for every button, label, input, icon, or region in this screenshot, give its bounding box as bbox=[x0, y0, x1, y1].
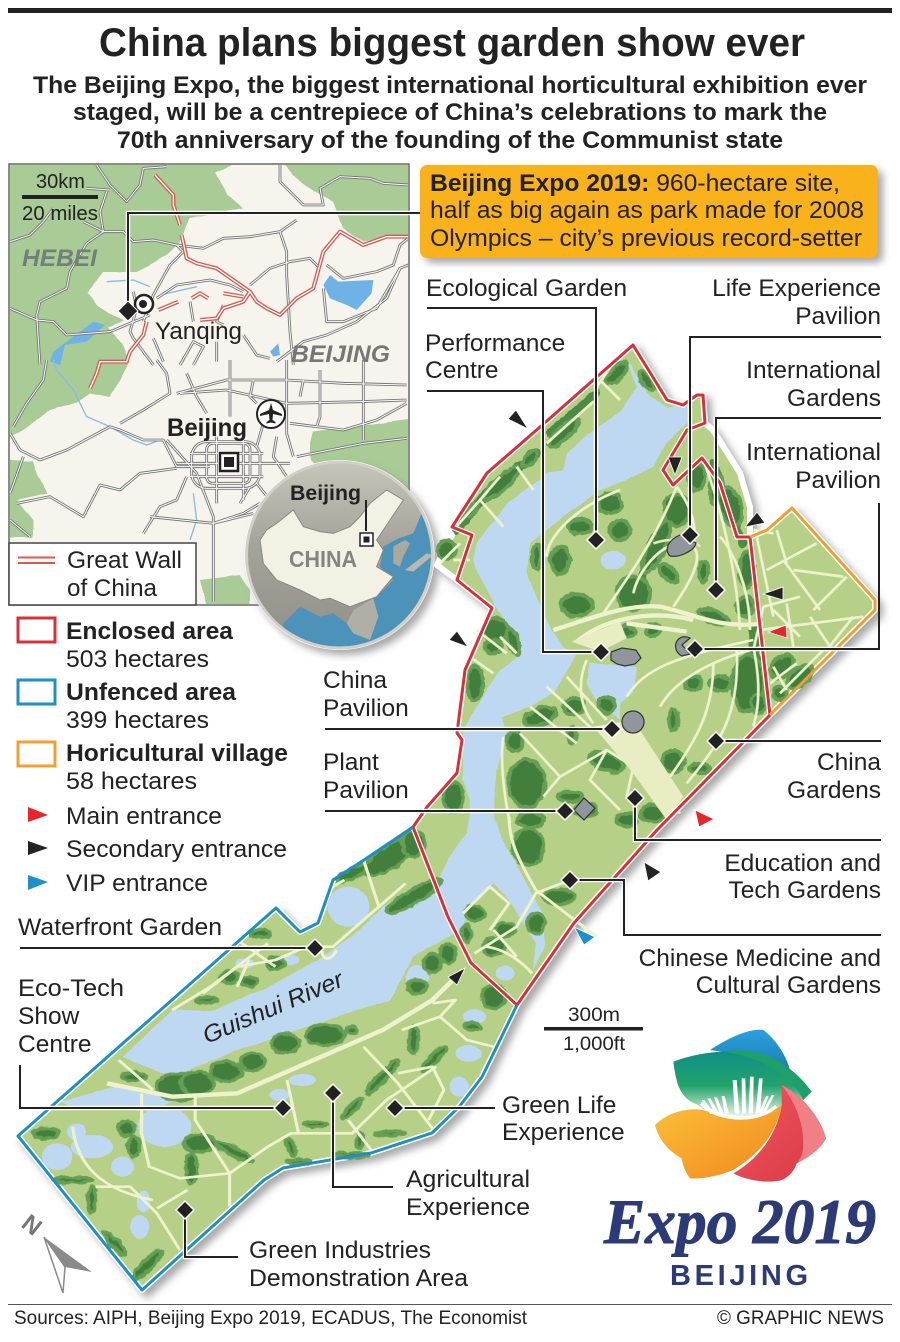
legend: areas and entrances: 503 hectares bbox=[66, 646, 209, 673]
label: Education and Tech Gardens: Education and bbox=[724, 850, 881, 877]
label: Eco-Tech Show Centre bbox=[18, 975, 124, 1058]
subtitle: staged, will be a centrepiece of China’s celebrations to mark the bbox=[73, 99, 827, 126]
legend: areas and entrances: 58 hectares bbox=[66, 768, 197, 795]
label: China Gardens: Gardens bbox=[787, 777, 881, 804]
unfenced area boundary bbox=[18, 827, 517, 1290]
label: International Pavilion bbox=[746, 439, 881, 494]
label: Green Industries Demonstration Area: Green Industries bbox=[249, 1237, 431, 1264]
subtitle bbox=[33, 72, 867, 154]
horticultural village boundary bbox=[750, 508, 875, 715]
roads bbox=[10, 165, 408, 602]
legend: areas and entrances: Secondary entrance bbox=[66, 836, 287, 863]
Expo logo: wordmark: BEIJING bbox=[670, 1260, 808, 1292]
legend: areas and entrances: Enclosed area bbox=[66, 618, 233, 645]
region label: Hebei: HEBEI bbox=[22, 245, 98, 272]
main site map bbox=[18, 345, 875, 1290]
legend: areas and entrances bbox=[18, 618, 288, 897]
legend: areas and entrances: 399 hectares bbox=[66, 707, 209, 734]
label: Education and Tech Gardens bbox=[724, 850, 881, 904]
green terrain bbox=[5, 160, 412, 608]
label: Life Experience Pavilion bbox=[712, 275, 881, 330]
woodland: north bbox=[438, 359, 817, 827]
site diamonds bbox=[176, 526, 725, 1219]
label: International Pavilion: International bbox=[746, 439, 881, 466]
label: Green Life Experience: Green Life bbox=[502, 1092, 616, 1119]
legend: areas and entrances: VIP entrance bbox=[66, 870, 208, 897]
label: International Gardens: Gardens bbox=[787, 385, 881, 412]
icon: Beijing city square bbox=[218, 451, 239, 472]
water bbox=[50, 275, 373, 365]
label: Chinese Medicine and Cultural Gardens: Chinese Medicine and bbox=[639, 945, 881, 972]
land bbox=[18, 345, 875, 1290]
compass bbox=[16, 1209, 92, 1293]
label: Agricultural Experience bbox=[406, 1166, 530, 1221]
label: Green Life Experience bbox=[502, 1092, 625, 1146]
inset scale bar: 20 miles bbox=[22, 203, 98, 225]
label: International Gardens bbox=[746, 357, 881, 412]
label: Agricultural Experience: Experience bbox=[406, 1194, 530, 1221]
label: Eco-Tech Show Centre: Eco-Tech bbox=[18, 975, 124, 1002]
enclosed area boundary bbox=[413, 345, 770, 1005]
icon: Yanqing target bbox=[135, 295, 153, 313]
label: Waterfront Garden: Waterfront Garden bbox=[18, 914, 222, 941]
Expo logo: flower bbox=[655, 1030, 826, 1182]
region label: Beijing: BEIJING bbox=[291, 341, 390, 368]
top rule bbox=[8, 8, 892, 13]
legend: areas and entrances: Main entrance bbox=[66, 803, 222, 830]
legend: Great Wall: of China bbox=[67, 575, 158, 602]
label: Performance Centre: Centre bbox=[425, 357, 499, 384]
label: Agricultural Experience: Agricultural bbox=[406, 1166, 530, 1193]
label: Green Life Experience: Experience bbox=[502, 1119, 625, 1146]
legend: areas and entrances: Unfenced area bbox=[66, 679, 236, 706]
label: China Pavilion bbox=[323, 667, 409, 722]
label: Life Experience Pavilion: Pavilion bbox=[795, 303, 881, 330]
river label: Guishui River bbox=[199, 966, 348, 1050]
legend: Great Wall bbox=[9, 543, 196, 605]
label: Eco-Tech Show Centre: Centre bbox=[18, 1031, 92, 1058]
Yanqing label: Yanqing bbox=[155, 318, 242, 345]
label: Chinese Medicine and Cultural Gardens bbox=[639, 945, 881, 999]
sources: Sources: AIPH, Beijing Expo 2019, ECADUS, The Economist bbox=[14, 1308, 528, 1329]
leader lines bbox=[20, 308, 881, 1257]
callout: Beijing Expo 2019: half as big again as park made for 2008 bbox=[430, 197, 864, 224]
label: Plant Pavilion: Plant bbox=[323, 749, 379, 776]
callout: Beijing Expo 2019 bbox=[420, 165, 878, 258]
label: China Pavilion: China bbox=[323, 667, 387, 694]
subtitle: 70th anniversary of the founding of the Communist state bbox=[117, 127, 783, 154]
label: International Pavilion: Pavilion bbox=[795, 467, 881, 494]
river island bbox=[459, 883, 536, 1003]
Expo logo: wordmark bbox=[603, 1186, 876, 1292]
label: Green Industries Demonstration Area: Demonstration Area bbox=[249, 1265, 468, 1292]
callout: Beijing Expo 2019: Beijing Expo 2019: 960-hectare site, bbox=[430, 170, 840, 197]
scale bar: 300m bbox=[568, 1004, 620, 1026]
label: Eco-Tech Show Centre: Show bbox=[18, 1003, 80, 1030]
label: Ecological Garden: Ecological Garden bbox=[426, 275, 627, 302]
footer rule bbox=[8, 1304, 892, 1305]
callout: Beijing Expo 2019: Olympics – city’s previous record-setter bbox=[430, 225, 862, 252]
label: International Gardens: International bbox=[746, 357, 881, 384]
inset scale bar bbox=[22, 171, 98, 225]
label: Performance Centre: Performance bbox=[425, 330, 565, 357]
label: China Pavilion: Pavilion bbox=[323, 695, 409, 722]
label: Education and Tech Gardens: Tech Gardens bbox=[728, 877, 881, 904]
paths bbox=[440, 363, 863, 823]
label: Green Industries Demonstration Area bbox=[249, 1237, 468, 1292]
scale bar bbox=[544, 1004, 643, 1055]
globe: CHINA bbox=[289, 546, 357, 572]
legend: Great Wall: Great Wall bbox=[67, 547, 182, 574]
label: Chinese Medicine and Cultural Gardens: Cultural Gardens bbox=[696, 972, 881, 999]
river bbox=[122, 358, 688, 1077]
woodland: south bbox=[34, 803, 597, 1282]
label: Plant Pavilion: Pavilion bbox=[323, 777, 409, 804]
globe bbox=[240, 455, 440, 655]
subtitle: The Beijing Expo, the biggest international horticultural exhibition ever bbox=[33, 72, 867, 99]
label: China Gardens: China bbox=[817, 749, 881, 776]
Great Wall bbox=[90, 175, 408, 388]
inset scale bar: 30km bbox=[36, 171, 85, 193]
compass: N bbox=[16, 1209, 47, 1241]
title: China plans biggest garden show ever bbox=[99, 21, 805, 65]
icon: airport bbox=[257, 400, 285, 428]
panel: locator map bbox=[5, 160, 412, 608]
label: Plant Pavilion bbox=[323, 749, 409, 804]
label: China Gardens bbox=[787, 749, 881, 804]
scale bar: 1,000ft bbox=[563, 1033, 626, 1055]
south-west ponds bbox=[42, 887, 515, 1238]
Beijing city label: Beijing bbox=[167, 414, 247, 442]
legend: areas and entrances: Horicultural village bbox=[66, 740, 288, 767]
globe: Beijing bbox=[290, 482, 361, 505]
credit: © GRAPHIC NEWS bbox=[717, 1308, 884, 1329]
pavilion buildings bbox=[574, 535, 696, 820]
entrance markers bbox=[448, 410, 787, 985]
Expo logo: wordmark: Expo 2019 bbox=[603, 1186, 876, 1257]
label: Life Experience Pavilion: Life Experience bbox=[712, 275, 881, 302]
great wall leader bbox=[118, 213, 420, 321]
label: Performance Centre bbox=[425, 330, 565, 384]
